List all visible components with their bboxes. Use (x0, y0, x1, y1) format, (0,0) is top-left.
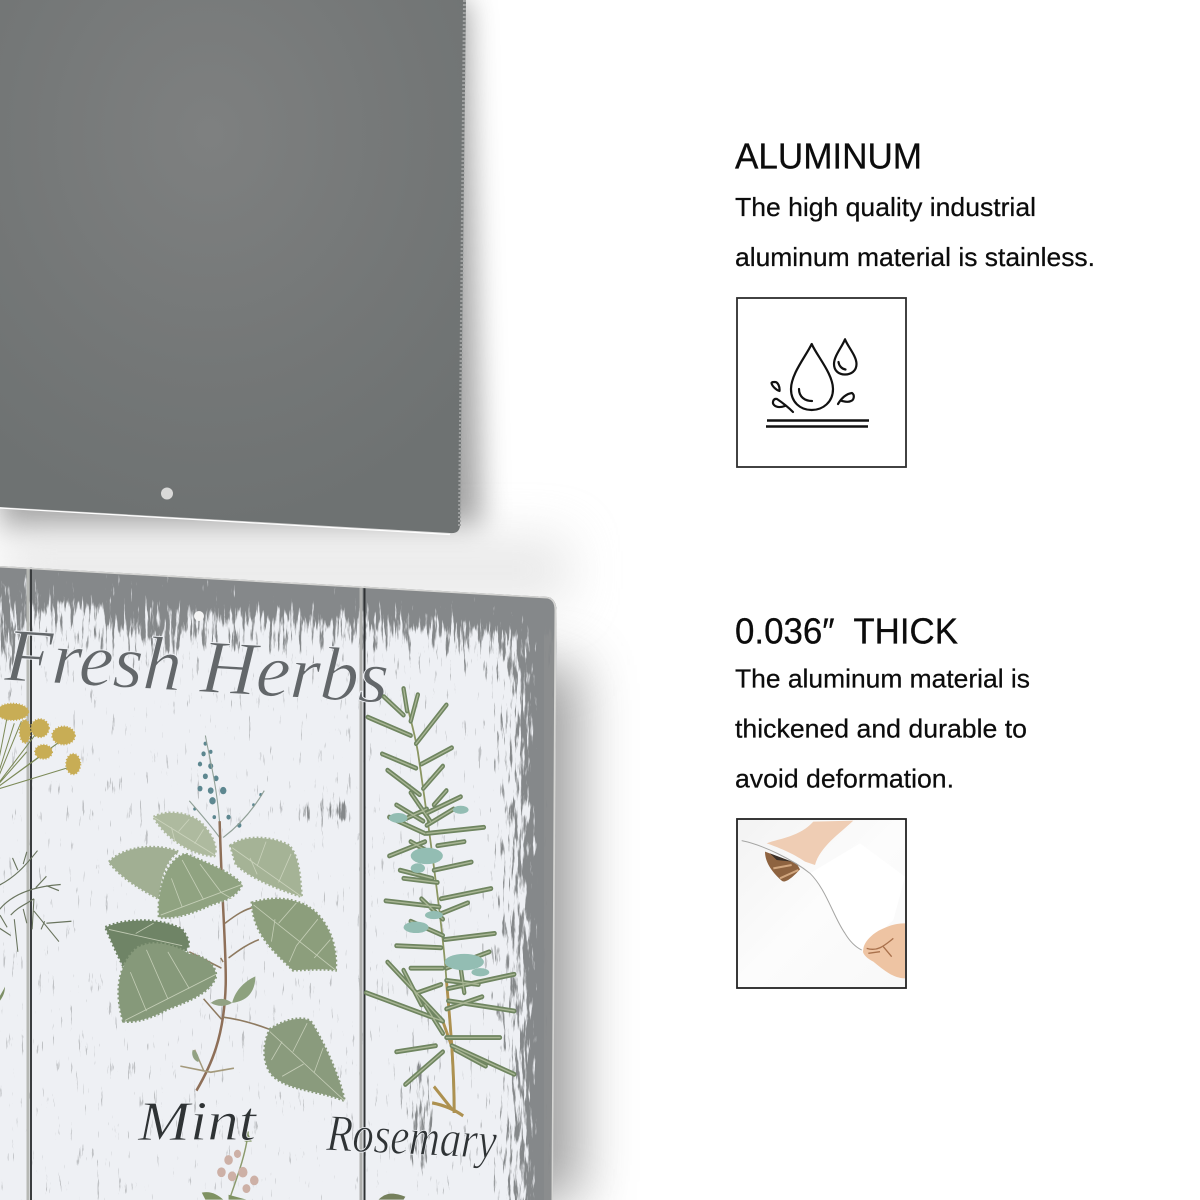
description: aluminum: aluminum material is stainless. (735, 242, 1095, 272)
sign edge bevel (0, 566, 556, 1200)
illustration: dill (0, 704, 80, 1003)
mint leaves with serrated edges (105, 813, 345, 1101)
description: thickness: thickened and durable to (735, 714, 1027, 744)
icon: waterproof drops (737, 298, 906, 467)
heading: Fresh Herbs: Fresh Herbs (2, 613, 391, 720)
upper hand (767, 821, 853, 865)
mint leaf veins (109, 817, 345, 1101)
description: thickness (735, 664, 1030, 794)
illustration: cropped herb at bottom (202, 1129, 405, 1200)
description: thickness: The aluminum material is (735, 664, 1030, 694)
mint flower spike (193, 742, 262, 828)
panel shadow: top sheet (0, 0, 482, 528)
photo: hands bending the thin sheet (737, 819, 906, 988)
panel shadow: gap above the sign (0, 535, 570, 605)
panel: back of aluminum sheet (0, 0, 466, 534)
plank seams (26, 566, 30, 1200)
heading: ALUMINUM: ALUMINUM (735, 136, 922, 176)
text block: thickness (735, 610, 1030, 794)
panel: front of sign with wood plank print (0, 560, 569, 1200)
description: thickness: avoid deformation. (735, 764, 954, 794)
description: aluminum: The high quality industrial (735, 192, 1036, 222)
hanging hole (194, 611, 204, 621)
illustration: mint plant (105, 736, 345, 1101)
label: Rosemary: Rosemary (325, 1105, 499, 1170)
rosemary blossoms (389, 806, 489, 976)
text block: aluminum (735, 136, 1095, 272)
label: Mint: Mint (137, 1091, 258, 1153)
distressed paint texture (0, 560, 569, 1200)
mounting hole (161, 488, 173, 500)
heading: 0.036 THICK: 0.036″ THICK (735, 610, 958, 652)
leaf fragment (0, 986, 5, 1000)
lower hand (863, 923, 905, 978)
illustration: rosemary (366, 689, 514, 1116)
panel shadow: bottom sign (490, 665, 578, 1200)
description: aluminum (735, 192, 1095, 272)
sheet edge (810, 843, 905, 950)
